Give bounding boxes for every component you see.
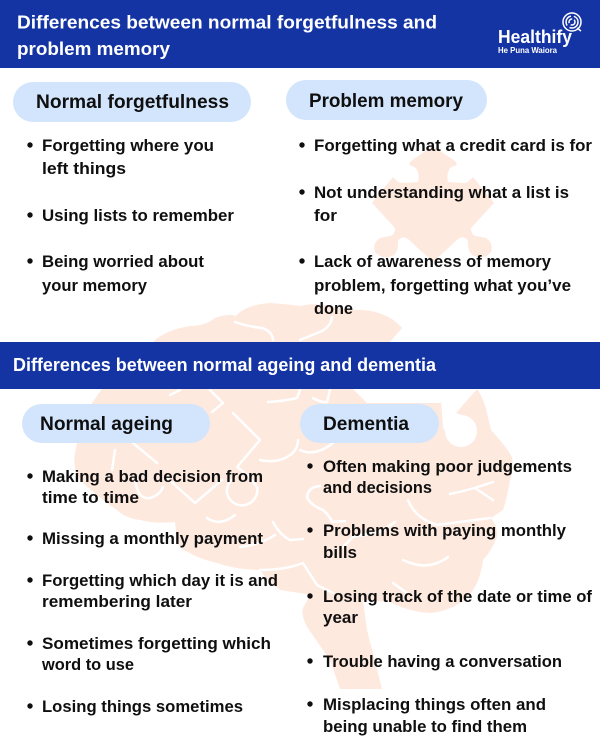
pill heading: Dementia (300, 404, 439, 443)
list: problem memory: for (314, 206, 337, 225)
list: dementia: Losing track of the date or time of (323, 587, 592, 606)
header banner (0, 0, 600, 68)
list: normal ageing: Forgetting which day it is and (42, 571, 278, 590)
title: problem memory (17, 39, 170, 59)
panel: normal forgetfulness (13, 82, 251, 295)
pill heading: Normal forgetfulness: Normal forgetfulness (36, 91, 229, 113)
list: problem memory: Forgetting what a credit card is for (314, 136, 592, 155)
section banner: normal ageing and dementia (0, 342, 600, 389)
list: problem memory: done (314, 299, 353, 318)
brain silhouette (74, 303, 513, 689)
list: problem memory (299, 136, 592, 318)
pill heading: Dementia: Dementia (323, 413, 409, 435)
logo: Healthify: He Puna Waiora (498, 46, 558, 55)
list: dementia: and decisions (323, 478, 432, 497)
list: normal ageing: word to use (41, 655, 134, 674)
list: normal forgetfulness: Using lists to remember (42, 206, 234, 225)
title: Differences between normal forgetfulness and (17, 12, 437, 32)
list: normal forgetfulness: Being worried about (42, 252, 204, 271)
pill heading: Normal ageing: Normal ageing (40, 413, 173, 435)
list: normal ageing: Sometimes forgetting which (42, 634, 271, 653)
pill heading: Problem memory: Problem memory (309, 90, 463, 112)
panel: problem memory (286, 80, 592, 318)
title (17, 12, 437, 59)
list: dementia: being unable to find them (323, 717, 527, 736)
list: normal forgetfulness: your memory (42, 276, 148, 295)
list: dementia (307, 457, 592, 736)
illustration: brain watermark (74, 303, 513, 689)
list: normal ageing: Losing things sometimes (42, 697, 243, 716)
logo: Healthify (498, 13, 581, 55)
list: problem memory: problem, forgetting what you’ve (314, 276, 571, 295)
list: dementia: bills (323, 543, 357, 562)
list: problem memory: Lack of awareness of memory (314, 252, 552, 271)
list: normal ageing: Missing a monthly payment (42, 529, 263, 548)
notch in brain (352, 388, 478, 447)
list: normal ageing: time to time (42, 488, 139, 507)
list: dementia: Misplacing things often and (323, 695, 546, 714)
list: dementia: Trouble having a conversation (323, 652, 562, 671)
pill heading: Normal forgetfulness (13, 82, 251, 122)
list: normal ageing: remembering later (42, 592, 192, 611)
list: problem memory: Not understanding what a list is (314, 183, 569, 202)
list: dementia: Problems with paying monthly (323, 521, 567, 540)
pill heading: Normal ageing (22, 404, 210, 443)
list: normal forgetfulness (27, 136, 234, 295)
list: normal forgetfulness: Forgetting where you (42, 136, 214, 155)
list: normal ageing (27, 467, 278, 716)
list: normal forgetfulness: left things (42, 159, 126, 178)
section banner: normal ageing and dementia: Differences between normal ageing and dementia (13, 355, 437, 375)
list: dementia: year (323, 608, 358, 627)
icon: puzzle piece watermark (372, 146, 494, 262)
logo: Healthify: Healthify (498, 26, 573, 47)
panel: dementia (300, 404, 592, 736)
brain fold lines (112, 317, 493, 593)
pill heading: Problem memory (286, 80, 487, 120)
list: normal ageing: Making a bad decision from (42, 467, 263, 486)
panel: normal ageing (22, 404, 278, 716)
list: dementia: Often making poor judgements (323, 457, 572, 476)
